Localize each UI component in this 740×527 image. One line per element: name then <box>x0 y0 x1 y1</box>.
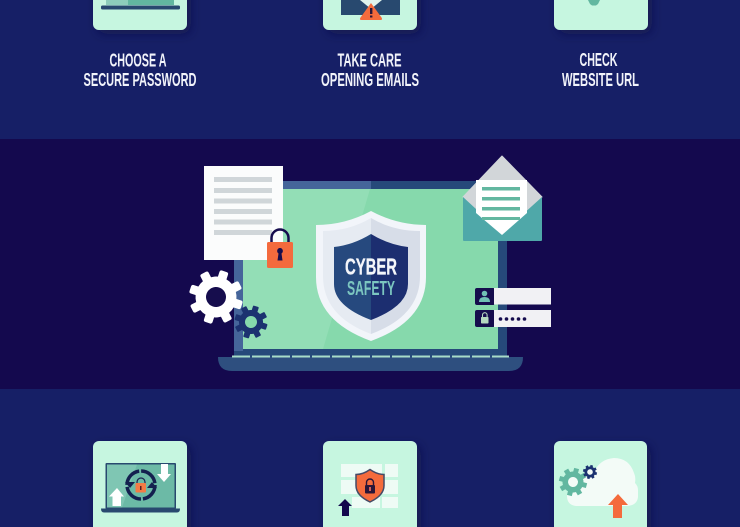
card <box>554 441 647 527</box>
card: emails <box>323 0 417 30</box>
heading: check website url: CHECK <box>580 50 618 70</box>
card: password <box>93 0 187 30</box>
panel: bottom right card, cloud backup <box>554 441 647 527</box>
laptop body <box>218 181 523 371</box>
panel: check website url <box>554 0 648 90</box>
heading: choose a secure password: SECURE PASSWORD <box>84 70 196 90</box>
text: cyber: CYBER <box>345 254 397 280</box>
heading: take care opening emails <box>321 50 419 90</box>
icon: green gem fragment <box>588 0 600 6</box>
gear: navy <box>581 463 599 481</box>
heading: choose a secure password: CHOOSE A <box>110 50 167 70</box>
card: url <box>554 0 648 30</box>
panel: bottom left card, update software <box>93 441 187 527</box>
password field <box>475 310 551 327</box>
card <box>93 441 187 527</box>
login form <box>475 288 551 327</box>
icon: laptop with sync lock <box>101 463 180 512</box>
icon: laptop base <box>101 0 180 10</box>
illustration: laptop with cyber safety shield <box>182 156 551 371</box>
panel: choose a secure password <box>84 0 196 90</box>
document <box>204 166 283 260</box>
panel: bottom center card, protect data <box>323 441 417 527</box>
panel: central dark band <box>0 139 740 389</box>
icon: small navy gear <box>230 301 272 343</box>
heading: choose a secure password <box>84 50 196 90</box>
icon: cloud with gears and upload arrow <box>556 458 638 518</box>
icon: brick wall with shield <box>338 464 398 516</box>
username field <box>475 288 551 305</box>
heading: check website url <box>562 50 639 90</box>
heading: check website url: WEBSITE URL <box>562 70 639 90</box>
arrow: upload <box>608 494 628 518</box>
heading: take care opening emails: TAKE CARE <box>338 50 402 70</box>
icon: envelope with warning <box>341 0 400 20</box>
card <box>323 441 417 527</box>
heading: take care opening emails: OPENING EMAILS <box>321 70 419 90</box>
icon: open envelope with letter <box>463 156 542 241</box>
shield: cyber safety <box>316 211 426 341</box>
text: safety: SAFETY <box>347 278 395 300</box>
gear: teal <box>556 465 590 499</box>
icon: orange padlock <box>267 230 293 268</box>
icon: large white gear <box>182 263 250 331</box>
panel: take care opening emails <box>321 0 419 90</box>
